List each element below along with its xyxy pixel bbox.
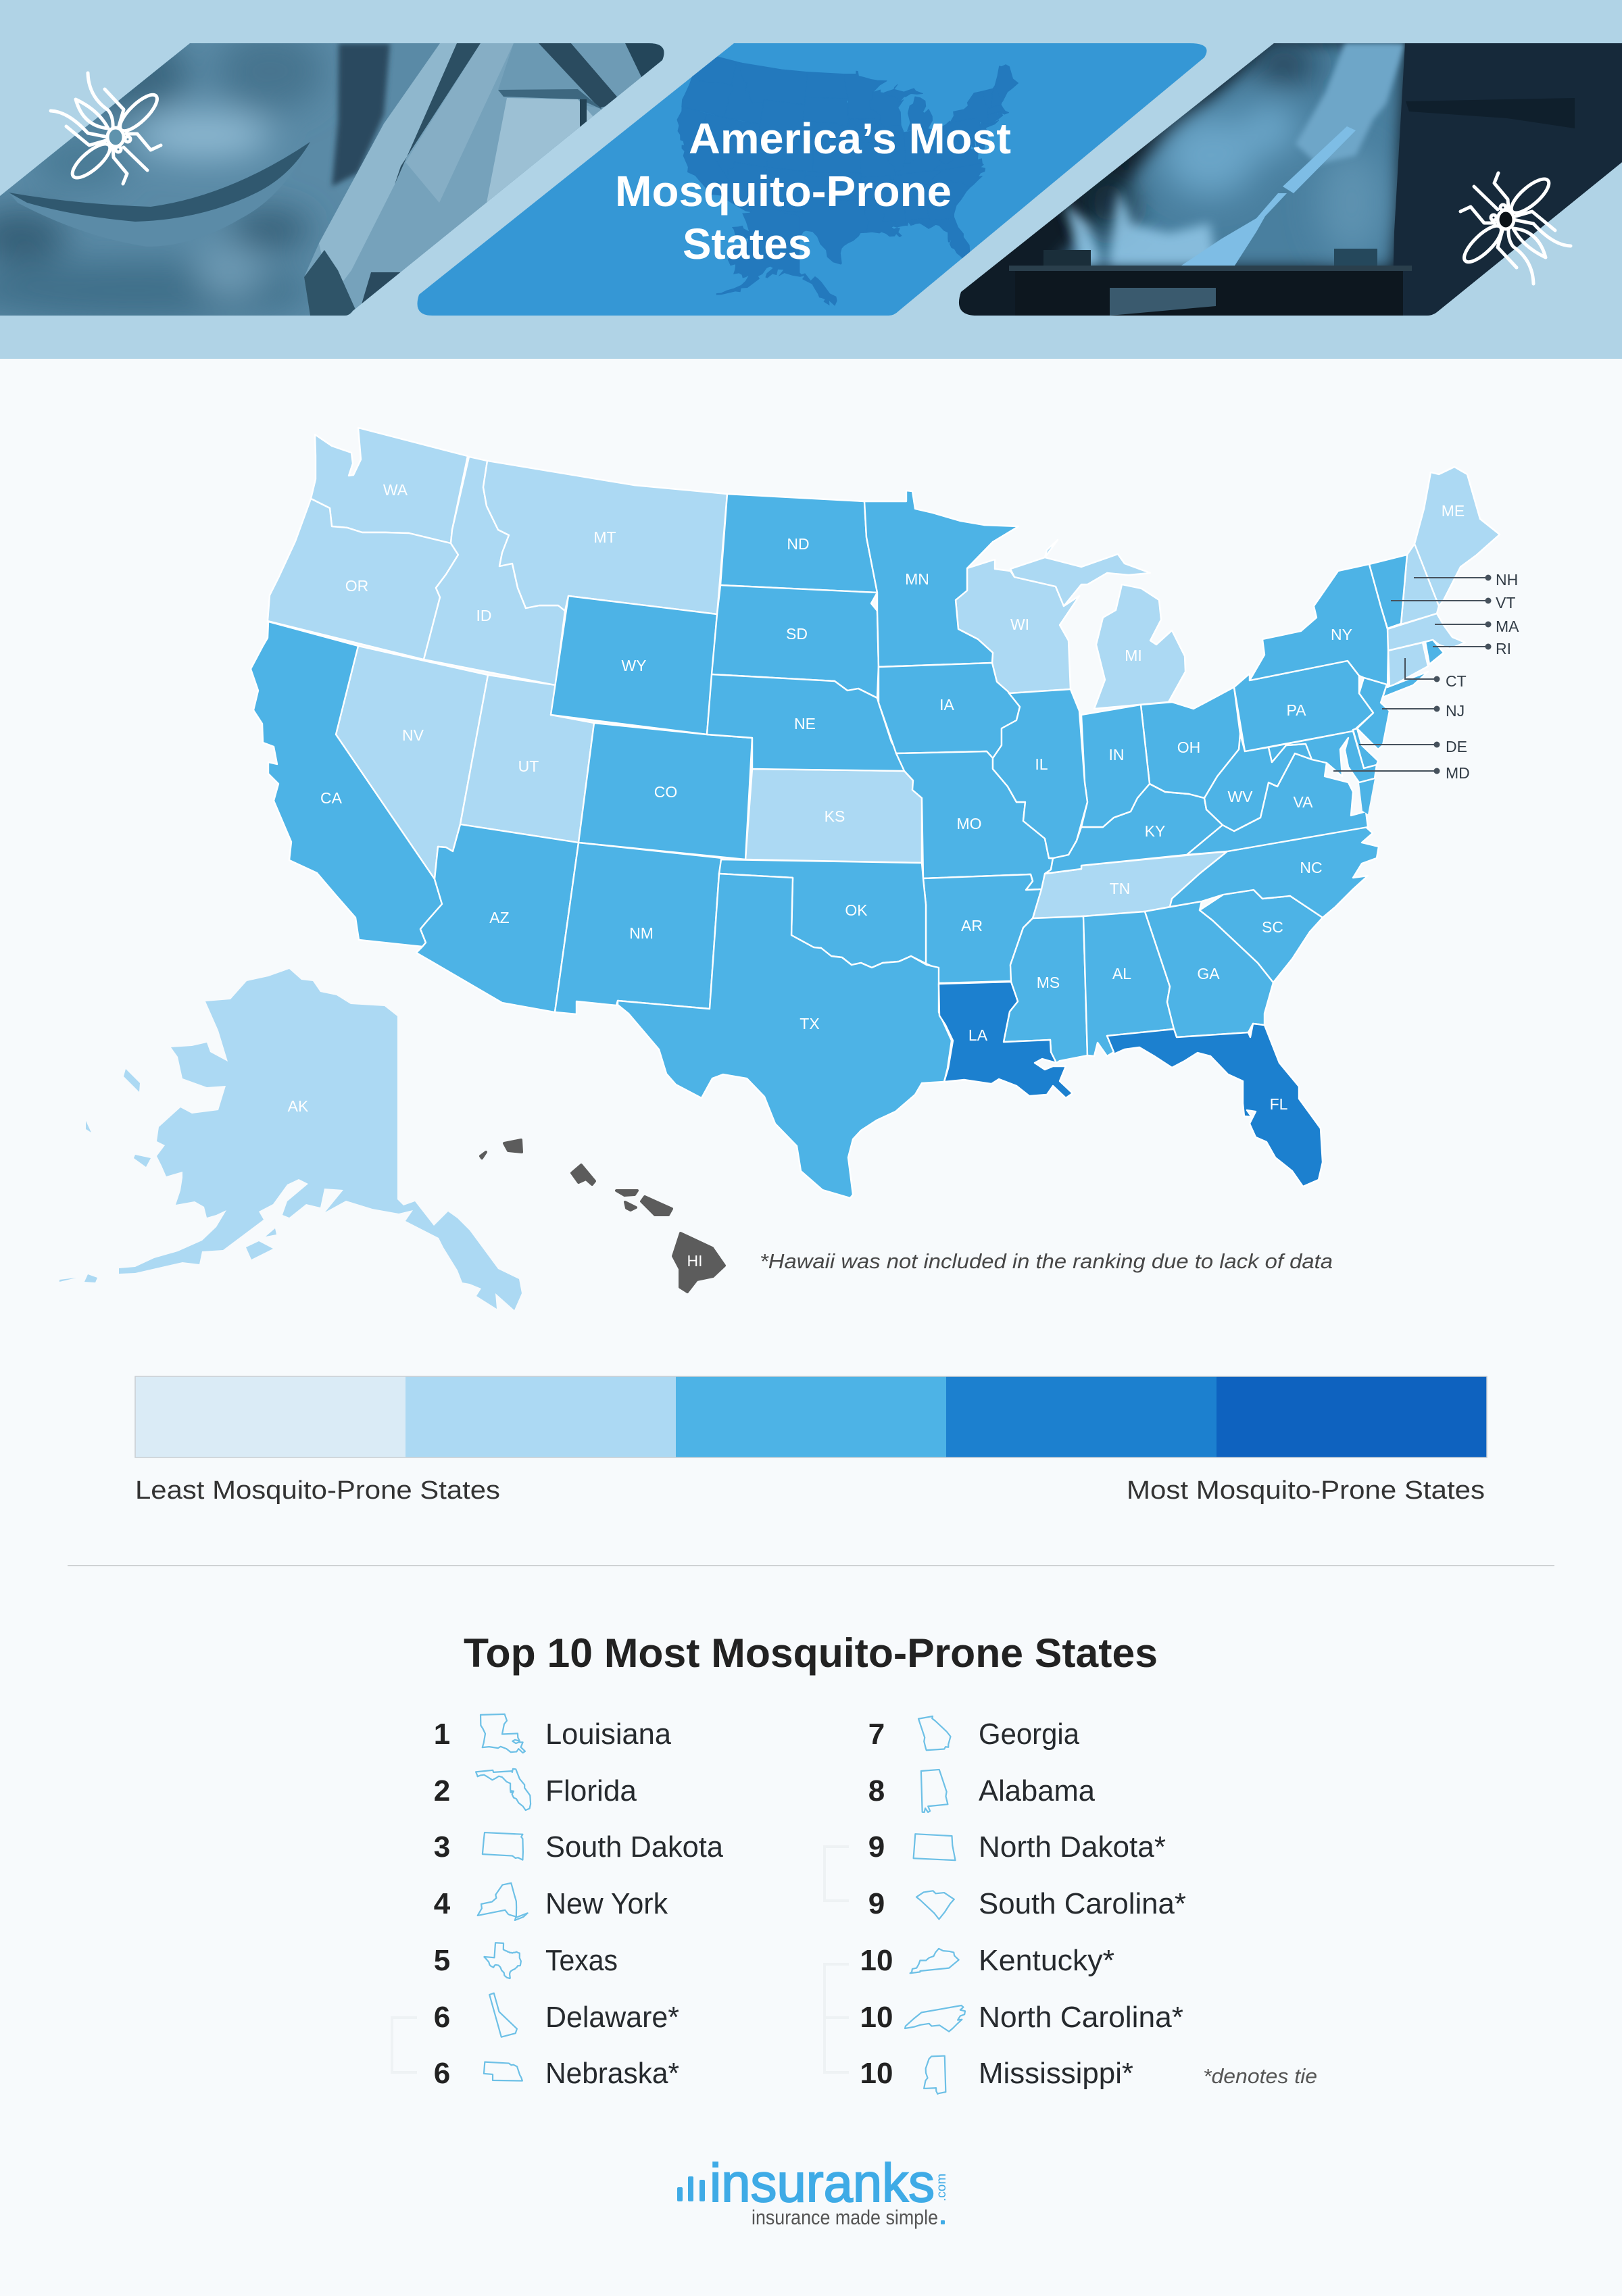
state: VT bbox=[1369, 555, 1407, 628]
row: Mississippi bbox=[860, 2056, 1133, 2094]
callout: CT bbox=[1405, 658, 1467, 690]
state: IL bbox=[993, 689, 1087, 858]
row: Kentucky: Kentucky* bbox=[979, 1944, 1114, 1977]
panel: title background bbox=[418, 43, 1207, 316]
state: PA bbox=[1234, 661, 1373, 751]
callout: VT: VT bbox=[1496, 594, 1515, 612]
row: North Carolina bbox=[860, 2001, 1183, 2034]
row: New York: New York bbox=[545, 1887, 668, 1920]
callout: NH bbox=[1414, 571, 1518, 589]
grill bbox=[1009, 249, 1412, 316]
row: Texas: 5 bbox=[434, 1944, 450, 1977]
state: ME bbox=[1415, 467, 1500, 606]
callout: NJ bbox=[1382, 702, 1465, 720]
state: VA bbox=[1187, 753, 1375, 855]
state: IA: IA bbox=[939, 696, 955, 714]
row: Delaware: Delaware* bbox=[545, 2001, 679, 2034]
Hawaii note: *Hawaii was not included in the ranking due to lack of data bbox=[760, 1249, 1333, 1273]
title: America’s Most bbox=[689, 114, 1011, 163]
spatula bbox=[1181, 126, 1356, 266]
state: MO bbox=[896, 751, 1053, 890]
callout: CT: CT bbox=[1446, 672, 1467, 690]
flames bbox=[1064, 189, 1216, 266]
state: ND bbox=[720, 494, 877, 593]
state: KY: KY bbox=[1145, 822, 1165, 840]
callout: NH: NH bbox=[1496, 571, 1518, 589]
state: IA bbox=[879, 663, 1020, 758]
row: North Dakota: North Dakota* bbox=[979, 1830, 1166, 1864]
state: NY: NY bbox=[1331, 626, 1352, 643]
row: Louisiana bbox=[434, 1714, 672, 1753]
state: MN bbox=[864, 491, 1018, 667]
panel: camping photo bbox=[0, 30, 676, 321]
heading: top 10: Top 10 Most Mosquito-Prone States bbox=[464, 1630, 1158, 1676]
apron bbox=[1392, 43, 1622, 316]
state: NM bbox=[555, 843, 722, 1014]
state: MN: MN bbox=[905, 570, 929, 588]
state: ND: ND bbox=[787, 535, 810, 553]
row: South Carolina: South Carolina* bbox=[979, 1887, 1186, 1920]
state: NE: NE bbox=[794, 715, 816, 732]
state: KS: KS bbox=[825, 807, 845, 825]
state: VA: VA bbox=[1294, 793, 1313, 811]
row: Texas: Texas bbox=[545, 1944, 618, 1977]
state: LA: LA bbox=[968, 1026, 988, 1044]
state: OR bbox=[268, 499, 458, 659]
state: CA bbox=[251, 622, 442, 947]
state: WV bbox=[1204, 734, 1312, 831]
state: NC: NC bbox=[1300, 859, 1323, 876]
row: New York: 4 bbox=[434, 1887, 451, 1920]
callout: VT bbox=[1391, 594, 1515, 612]
logo: insuranks: insuranks bbox=[710, 2153, 935, 2213]
state: OH: OH bbox=[1177, 739, 1200, 756]
state: GA: GA bbox=[1197, 965, 1220, 982]
title: States bbox=[683, 220, 812, 268]
state: AK: AK bbox=[288, 1097, 309, 1115]
row: Georgia bbox=[868, 1716, 1079, 1751]
callout: DE bbox=[1359, 738, 1467, 755]
state: AL bbox=[1083, 912, 1174, 1056]
light-blue states bbox=[59, 428, 1500, 1310]
callout: RI: RI bbox=[1496, 640, 1511, 657]
state: MS bbox=[1004, 916, 1087, 1063]
state: KS bbox=[745, 769, 922, 863]
state: MD bbox=[1269, 731, 1377, 782]
row: Louisiana: Louisiana bbox=[545, 1718, 672, 1751]
state: RI bbox=[1425, 640, 1444, 664]
state: UT bbox=[460, 675, 594, 843]
Hawaii: HI bbox=[687, 1252, 703, 1270]
icon: mosquito left bbox=[51, 73, 162, 184]
header banner bbox=[0, 0, 1622, 359]
US map bbox=[59, 428, 1500, 1310]
logo: insuranks: .com bbox=[935, 2174, 949, 2201]
state: NE bbox=[707, 674, 904, 771]
row: Nebraska: 6 bbox=[434, 2057, 450, 2090]
row: Delaware bbox=[434, 1993, 679, 2037]
row: North Carolina: 10 bbox=[860, 2001, 893, 2034]
state: NV: NV bbox=[402, 726, 424, 744]
state: NV bbox=[336, 646, 488, 879]
row: Nebraska bbox=[434, 2057, 679, 2090]
title bbox=[615, 114, 1011, 268]
row: Florida: 2 bbox=[434, 1774, 450, 1807]
state: SC: SC bbox=[1262, 918, 1283, 936]
state: WA bbox=[311, 428, 468, 543]
state: WA: WA bbox=[383, 481, 408, 499]
state: MI bbox=[1010, 540, 1185, 709]
row: North Dakota bbox=[868, 1830, 1166, 1864]
state: MS: MS bbox=[1037, 974, 1060, 991]
state: WI bbox=[956, 559, 1079, 693]
legend label: most: Most Mosquito-Prone States bbox=[1127, 1476, 1485, 1505]
callout: NJ: NJ bbox=[1446, 702, 1465, 720]
hammock bbox=[9, 142, 310, 230]
row: Mississippi: 10 bbox=[860, 2057, 893, 2090]
state: CA: CA bbox=[320, 789, 343, 807]
state: TX: TX bbox=[800, 1015, 820, 1032]
state: AK bbox=[59, 969, 522, 1310]
logo: insuranks bbox=[677, 2153, 949, 2229]
row: Kentucky: 10 bbox=[860, 1944, 893, 1977]
row: South Carolina: 9 bbox=[868, 1887, 885, 1920]
state: MO: MO bbox=[956, 815, 982, 832]
row: New York bbox=[434, 1883, 668, 1920]
state: OK bbox=[719, 859, 926, 968]
row: Kentucky bbox=[860, 1944, 1114, 1977]
row: Alabama bbox=[868, 1770, 1096, 1812]
state: UT: UT bbox=[518, 757, 539, 775]
callout leaders for small northeastern states bbox=[1333, 571, 1519, 782]
state: AZ: AZ bbox=[489, 909, 510, 926]
state: LA bbox=[939, 982, 1073, 1098]
callout: MA bbox=[1435, 618, 1519, 635]
mid-blue states bbox=[251, 491, 1444, 1198]
callout: RI bbox=[1433, 640, 1511, 657]
title: Mosquito-Prone bbox=[615, 167, 952, 216]
state: GA bbox=[1145, 901, 1273, 1037]
row: Texas bbox=[434, 1943, 618, 1978]
state: NM: NM bbox=[629, 924, 654, 942]
callout: MD: MD bbox=[1446, 764, 1470, 782]
state: IN: IN bbox=[1108, 746, 1125, 764]
state: TN bbox=[1033, 851, 1227, 919]
row: Alabama: Alabama bbox=[979, 1774, 1096, 1807]
state: NH bbox=[1401, 544, 1439, 624]
state: AR bbox=[923, 874, 1041, 983]
row: Nebraska: Nebraska* bbox=[545, 2057, 679, 2090]
state: ME: ME bbox=[1442, 502, 1465, 520]
state: WI: WI bbox=[1010, 616, 1029, 633]
logo: insuranks: insurance made simple bbox=[752, 2205, 938, 2229]
callout: DE: DE bbox=[1446, 738, 1467, 755]
map silhouette behind title bbox=[677, 54, 1018, 306]
state: CT bbox=[1388, 643, 1428, 687]
Hawaii bbox=[481, 1140, 724, 1292]
icon: mosquito right bbox=[1459, 173, 1571, 284]
state: NC bbox=[1170, 827, 1379, 918]
state: ID bbox=[424, 457, 565, 685]
row: South Dakota: South Dakota bbox=[545, 1830, 724, 1864]
row: Georgia: Georgia bbox=[979, 1718, 1079, 1751]
state: KY bbox=[1045, 784, 1223, 874]
state: ID: ID bbox=[476, 607, 492, 624]
row: North Dakota: 9 bbox=[868, 1830, 885, 1864]
state: WY: WY bbox=[621, 657, 647, 674]
state: CO bbox=[579, 723, 752, 859]
state: NY bbox=[1250, 564, 1428, 697]
row: Georgia: 7 bbox=[868, 1718, 885, 1751]
state: OH bbox=[1141, 687, 1240, 798]
state: MT bbox=[483, 461, 727, 614]
state: MA bbox=[1387, 614, 1465, 651]
state: SC bbox=[1200, 890, 1323, 982]
state: NJ bbox=[1357, 678, 1390, 749]
state: TX bbox=[618, 874, 952, 1198]
row: North Carolina: North Carolina* bbox=[979, 2001, 1183, 2034]
row: South Dakota bbox=[434, 1830, 724, 1864]
state: AR: AR bbox=[961, 917, 983, 934]
state: MI: MI bbox=[1125, 647, 1142, 664]
legend label: least: Least Mosquito-Prone States bbox=[135, 1476, 500, 1505]
callout: MD bbox=[1333, 764, 1470, 782]
row: Mississippi: Mississippi* bbox=[979, 2057, 1133, 2090]
state: CO: CO bbox=[654, 783, 677, 801]
state: FL bbox=[1107, 1024, 1323, 1187]
state: AZ bbox=[416, 824, 579, 1012]
row: Alabama: 8 bbox=[868, 1774, 885, 1807]
top 10 list: right column bbox=[860, 1716, 1186, 2094]
state: MT: MT bbox=[593, 528, 616, 546]
state: OR: OR bbox=[345, 577, 368, 595]
panel: grilling photo bbox=[946, 43, 1622, 316]
state: DE bbox=[1353, 728, 1378, 768]
tie brackets bbox=[392, 1847, 849, 2072]
state: IN bbox=[1081, 705, 1150, 827]
state: WV: WV bbox=[1227, 788, 1253, 805]
state: IL: IL bbox=[1035, 755, 1048, 773]
state: TN: TN bbox=[1110, 880, 1130, 897]
callout: MA: MA bbox=[1496, 618, 1519, 635]
legend colour scale bbox=[135, 1376, 1487, 1457]
row: South Carolina bbox=[868, 1887, 1186, 1920]
state: SD: SD bbox=[786, 625, 808, 643]
state: WY bbox=[551, 596, 717, 734]
top 10 list: left column bbox=[434, 1714, 724, 2090]
row: South Dakota: 3 bbox=[434, 1830, 450, 1864]
tie note: *denotes tie bbox=[1203, 2064, 1317, 2088]
row: Delaware: 6 bbox=[434, 2001, 450, 2034]
row: Florida bbox=[434, 1769, 637, 1810]
state: OK: OK bbox=[845, 901, 868, 919]
state: SD bbox=[712, 585, 879, 698]
state: AL: AL bbox=[1112, 965, 1131, 982]
row: Louisiana: 1 bbox=[434, 1718, 450, 1751]
state: FL: FL bbox=[1270, 1095, 1288, 1113]
dark-blue states bbox=[939, 982, 1323, 1187]
state: PA: PA bbox=[1287, 701, 1306, 719]
row: Florida: Florida bbox=[545, 1774, 637, 1807]
